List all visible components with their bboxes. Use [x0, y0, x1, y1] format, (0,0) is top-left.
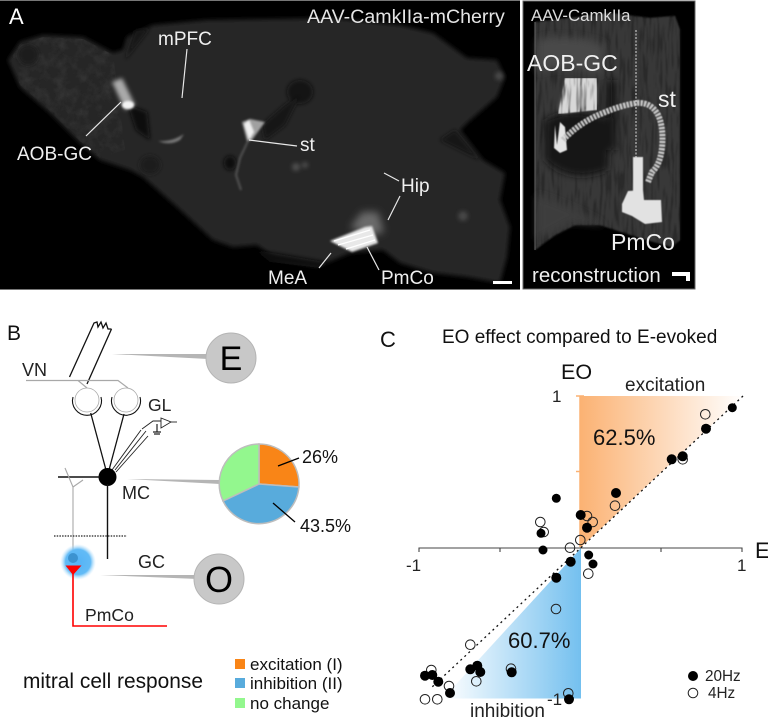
brain silhouette	[8, 18, 510, 283]
PmCo / MeA fluorescence	[330, 212, 384, 252]
scale bracket	[672, 272, 690, 281]
scale bar	[493, 281, 512, 284]
label: Hip with leaders: Hip	[401, 176, 430, 197]
dotted layer boundary	[54, 535, 127, 537]
legend: mitral cell response	[23, 655, 343, 713]
reconstruction volume	[535, 13, 680, 250]
brain texture	[10, 37, 125, 158]
label: st with leader	[249, 135, 316, 156]
label: MC: MC	[122, 483, 150, 503]
PmCo bright region	[622, 157, 662, 224]
label: AOB-GC with leader	[17, 102, 121, 165]
scatter legend 4Hz: 4Hz	[708, 685, 735, 702]
legend item no change: no change	[250, 694, 329, 713]
label: AAV-CamkIIa-mCherry: AAV-CamkIIa-mCherry	[307, 6, 505, 28]
x axis	[419, 548, 742, 552]
red PmCo axon	[66, 566, 167, 626]
stria tract curve	[563, 103, 662, 182]
y axis	[576, 396, 584, 547]
label: PmCo: PmCo	[611, 229, 675, 255]
vomeronasal nerve line	[26, 380, 128, 388]
label: VN: VN	[22, 360, 47, 380]
identity dotted line	[431, 396, 743, 688]
label: PmCo: PmCo	[85, 605, 134, 625]
axis label EO: EO	[561, 360, 592, 384]
mitral cell dendrites	[91, 413, 124, 470]
panel A: reconstruction image	[523, 1, 695, 289]
tick label y -1: -1	[547, 690, 562, 709]
electrode O	[100, 554, 244, 604]
scatter legend 4Hz	[688, 685, 735, 702]
electrode E	[112, 333, 256, 383]
scatter legend 20Hz	[688, 668, 741, 685]
panel letter C: C	[380, 327, 396, 352]
pie chart: mitral cell response	[219, 444, 299, 524]
label excitation: excitation	[625, 375, 705, 396]
panel A: sagittal brain image	[0, 0, 520, 290]
AOB-GC fluorescence	[112, 78, 184, 143]
legend title: mitral cell response	[23, 670, 203, 693]
label: AOB-GC: AOB-GC	[527, 50, 618, 76]
scatter legend 20Hz: 20Hz	[705, 668, 741, 685]
granule cell soma	[68, 553, 78, 563]
panel letter B: B	[7, 322, 21, 345]
percent excitation: 62.5%	[593, 425, 655, 450]
label: MeA with leader: MeA	[268, 268, 307, 289]
panel C: scatter plot	[380, 327, 768, 718]
blue inhibition region	[443, 548, 581, 698]
electrode E: E	[220, 340, 242, 378]
GL recording electrode	[112, 418, 177, 472]
blue light glow	[60, 544, 96, 580]
glomeruli	[72, 388, 140, 415]
legend item inhibition: inhibition (II)	[250, 674, 343, 693]
tick label x -1: -1	[406, 556, 421, 575]
stria terminalis fluorescence	[236, 119, 265, 190]
label: PmCo with leader	[367, 247, 434, 289]
label: AAV-CamkIIa: AAV-CamkIIa	[531, 6, 631, 25]
tick label x 1: 1	[737, 556, 746, 575]
dendrite apical tuft	[70, 322, 112, 384]
label: Hip with leaders	[384, 173, 430, 220]
filled circles: 20Hz	[420, 403, 737, 704]
label: reconstruction: reconstruction	[532, 264, 661, 287]
chart title: EO effect compared to E-evoked	[442, 327, 717, 348]
label: mPFC with leader	[158, 29, 212, 98]
label: mPFC with leader: mPFC	[158, 29, 212, 50]
lateral and descending dendrites	[58, 477, 108, 559]
panel B: circuit diagram	[7, 322, 351, 626]
label: st with leader: st	[300, 135, 316, 156]
label: AOB-GC with leader: AOB-GC	[17, 144, 92, 165]
open circles: 4Hz	[420, 410, 710, 704]
panel letter A: A	[9, 4, 24, 29]
pie label 43.5%	[273, 503, 351, 536]
label: GL: GL	[148, 395, 172, 415]
pie label 26%: 26%	[302, 447, 338, 467]
electrode O: O	[205, 559, 233, 600]
midline dotted line	[635, 30, 637, 160]
label: st: st	[658, 86, 676, 112]
gray granule dendrite	[65, 468, 83, 553]
percent inhibition: 60.7%	[508, 628, 570, 653]
label: MeA with leader	[268, 253, 331, 289]
label: PmCo with leader: PmCo	[381, 268, 434, 289]
pie label 26%	[278, 447, 338, 467]
pie electrode stem	[127, 479, 220, 484]
brain inner shading	[18, 28, 503, 268]
mitral cell body	[98, 468, 116, 486]
orange excitation region	[580, 396, 743, 547]
tick label y 1: 1	[552, 387, 561, 406]
label: GC: GC	[138, 552, 165, 572]
AOB-GC bright region	[554, 78, 597, 153]
legend item excitation: excitation (I)	[250, 655, 343, 674]
pie label 43.5%: 43.5%	[300, 516, 351, 536]
